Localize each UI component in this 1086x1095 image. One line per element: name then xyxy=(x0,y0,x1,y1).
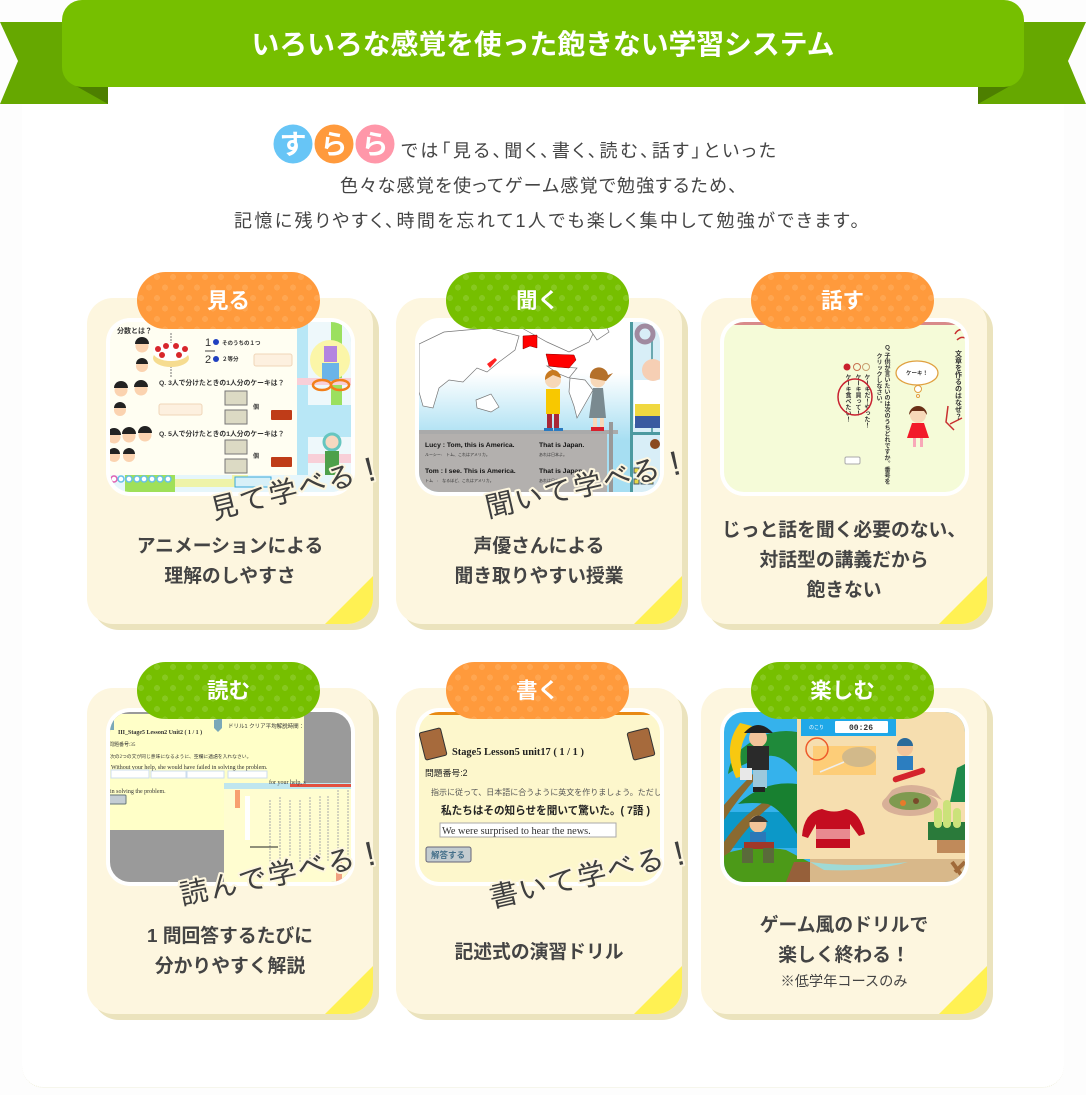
screenshot: listening lesson: Tom : I see. This is America. xyxy=(425,468,516,475)
screenshot: writing drill: 解答する xyxy=(431,850,465,860)
screenshot: reading lesson: III_Stage5 Lesson2 Unit2 ( 1 / 1 ) xyxy=(118,729,202,736)
screenshot: fractions lesson: ２等分 xyxy=(222,355,239,363)
screenshot: fractions lesson: Q. 5人で分けたときの1人分のケーキは？ xyxy=(159,429,284,438)
screenshot: listening lesson: トム : なるほど、これはアメリカ。 xyxy=(425,477,494,483)
caption: 対話型の講義だから xyxy=(759,549,929,570)
pill: 楽しむ xyxy=(751,662,934,719)
handwriting: 聞いて学べる！: 聞いて学べる！ xyxy=(482,446,694,522)
screenshot: fractions lesson: 個 xyxy=(253,403,259,411)
screenshot: reading lesson: in solving the problem. xyxy=(110,789,166,795)
handwriting: 読んで学べる！: 読んで学べる！ xyxy=(177,837,388,909)
screenshot: fractions lesson xyxy=(106,318,355,496)
screenshot: writing drill: 私たちはその知らせを聞いて驚いた。( 7語 ) xyxy=(441,804,650,817)
pill: 書く: 書く xyxy=(516,679,559,703)
screenshot: speaking lesson: ケーキ！ xyxy=(906,369,928,377)
screenshot: speaking lesson: 文章を作るのはなぜ？ xyxy=(954,349,962,420)
pill: 読む xyxy=(137,662,320,719)
caption: 声優さんによる xyxy=(474,535,604,556)
ribbon tails and folds xyxy=(0,22,1086,104)
intro line 3: 記憶に残りやすく、時間を忘れて1人でも楽しく集中して勉強ができます。 xyxy=(234,211,862,231)
screenshot: game drill xyxy=(720,708,969,886)
panel: 聞く xyxy=(396,272,688,630)
caption: 分かりやすく解説 xyxy=(155,955,305,976)
title band xyxy=(62,0,1024,87)
screenshot: speaking lesson xyxy=(720,318,969,496)
screenshot: writing drill: Stage5 Lesson5 unit17 ( 1 / 1 ) xyxy=(452,747,584,758)
pill: 話す xyxy=(751,272,934,329)
caption: 理解のしやすさ xyxy=(164,565,296,586)
screenshot: listening lesson: Lucy : Tom, this is America. xyxy=(425,442,515,449)
ribbon heading xyxy=(0,0,1086,104)
caption xyxy=(147,925,313,976)
logo: すらら xyxy=(274,124,394,164)
caption xyxy=(137,535,323,586)
intro text block xyxy=(234,124,862,231)
screenshot: listening lesson: あれは日本よ。 xyxy=(539,451,567,457)
intro line 2: 色々な感覚を使ってゲーム感覚で勉強するため、 xyxy=(340,176,739,196)
screenshot: writing drill: 問題番号:2 xyxy=(425,767,468,778)
screenshot: listening lesson: That is Japan. xyxy=(539,468,584,475)
pill: 見る: 見る xyxy=(207,289,250,313)
screenshot: reading lesson: 次の2つの文が同じ意味になるように、空欄に適語を入れなさい。 xyxy=(110,753,251,760)
pill: 楽しむ: 楽しむ xyxy=(810,679,875,703)
handwriting: 書いて学べる！: 書いて学べる！ xyxy=(486,836,698,912)
screenshot: speaking lesson: クリックしなさい。 xyxy=(875,352,882,407)
screenshot: reading lesson: ドリル1 クリア平均解説時間： xyxy=(228,722,304,730)
screenshot: fractions lesson: そのうちの１つ xyxy=(222,339,261,347)
screenshot: speaking lesson: ケーキ食べたい！ xyxy=(844,374,851,422)
panel: 見る xyxy=(87,272,379,630)
logo: すらら: す xyxy=(280,130,306,160)
panel: 話す xyxy=(701,272,993,630)
screenshot: game drill: 00:26 xyxy=(849,724,873,733)
screenshot: fractions lesson: 1 xyxy=(205,337,211,349)
screenshot: fractions lesson: 分数とは？ xyxy=(117,326,152,335)
panel: 読む xyxy=(87,662,379,1020)
caption: ゲーム風のドリルで xyxy=(760,914,928,935)
caption: 聞き取りやすい授業 xyxy=(454,565,624,586)
pill: 話す: 話す xyxy=(821,289,864,313)
panel: 書く xyxy=(396,662,688,1020)
caption: 記述式の演習ドリル xyxy=(454,941,624,962)
intro line 1: では「見る、聞く、書く、読む、話す」といった xyxy=(401,141,779,161)
screenshot: speaking lesson: ケーキだ！やった！ xyxy=(863,374,870,428)
screenshot: fractions lesson: Q. 3人で分けたときの1人分のケーキは？ xyxy=(159,378,284,387)
caption: 飽きない xyxy=(806,579,882,600)
pill: 聞く xyxy=(446,272,629,329)
pill: 聞く: 聞く xyxy=(516,289,559,313)
screenshot: fractions lesson: 個 xyxy=(253,452,259,460)
screenshot: reading lesson: for your help, s xyxy=(269,779,306,786)
caption: アニメーションによる xyxy=(137,535,323,556)
title band: いろいろな感覚を使った飽きない学習システム xyxy=(252,29,834,60)
caption xyxy=(454,535,624,586)
pill: 見る xyxy=(137,272,320,329)
screenshot: fractions lesson: 2 xyxy=(205,354,211,366)
screenshot: reading lesson: Without your help, she would have failed in solving the problem. xyxy=(111,764,268,771)
screenshot: game drill: のこり xyxy=(809,725,824,731)
screenshot: reading lesson xyxy=(106,708,355,886)
logo: すらら: ら xyxy=(320,130,348,160)
screenshot: listening lesson xyxy=(415,318,664,496)
screenshot: writing drill: We were surprised to hear the news. xyxy=(442,826,591,837)
handwriting: 見て学べる！: 見て学べる！ xyxy=(207,452,389,524)
logo: すらら: ら xyxy=(362,130,388,160)
note: ※低学年コースのみ xyxy=(780,974,907,990)
caption: じっと話を聞く必要のない、 xyxy=(722,519,966,540)
screenshot: listening lesson: That is Japan. xyxy=(539,442,584,449)
caption xyxy=(722,519,966,600)
screenshot: writing drill xyxy=(415,708,664,886)
pill: 書く xyxy=(446,662,629,719)
caption: 楽しく終わる！ xyxy=(778,944,910,965)
pill: 読む: 読む xyxy=(207,679,250,703)
screenshot: listening lesson: ルーシー: トム、これはアメリカ。 xyxy=(425,451,490,457)
panel: 楽しむ xyxy=(701,662,993,1020)
screenshot: listening lesson: あれは日本よ。 xyxy=(539,477,567,483)
screenshot: speaking lesson: ケーキ買って！ xyxy=(854,374,861,416)
caption: 1 問回答するたびに xyxy=(147,925,313,946)
caption xyxy=(760,914,928,965)
screenshot: speaking lesson: Ｑ 子供が言いたいのは次のうちどれですか。番号を xyxy=(883,345,890,485)
